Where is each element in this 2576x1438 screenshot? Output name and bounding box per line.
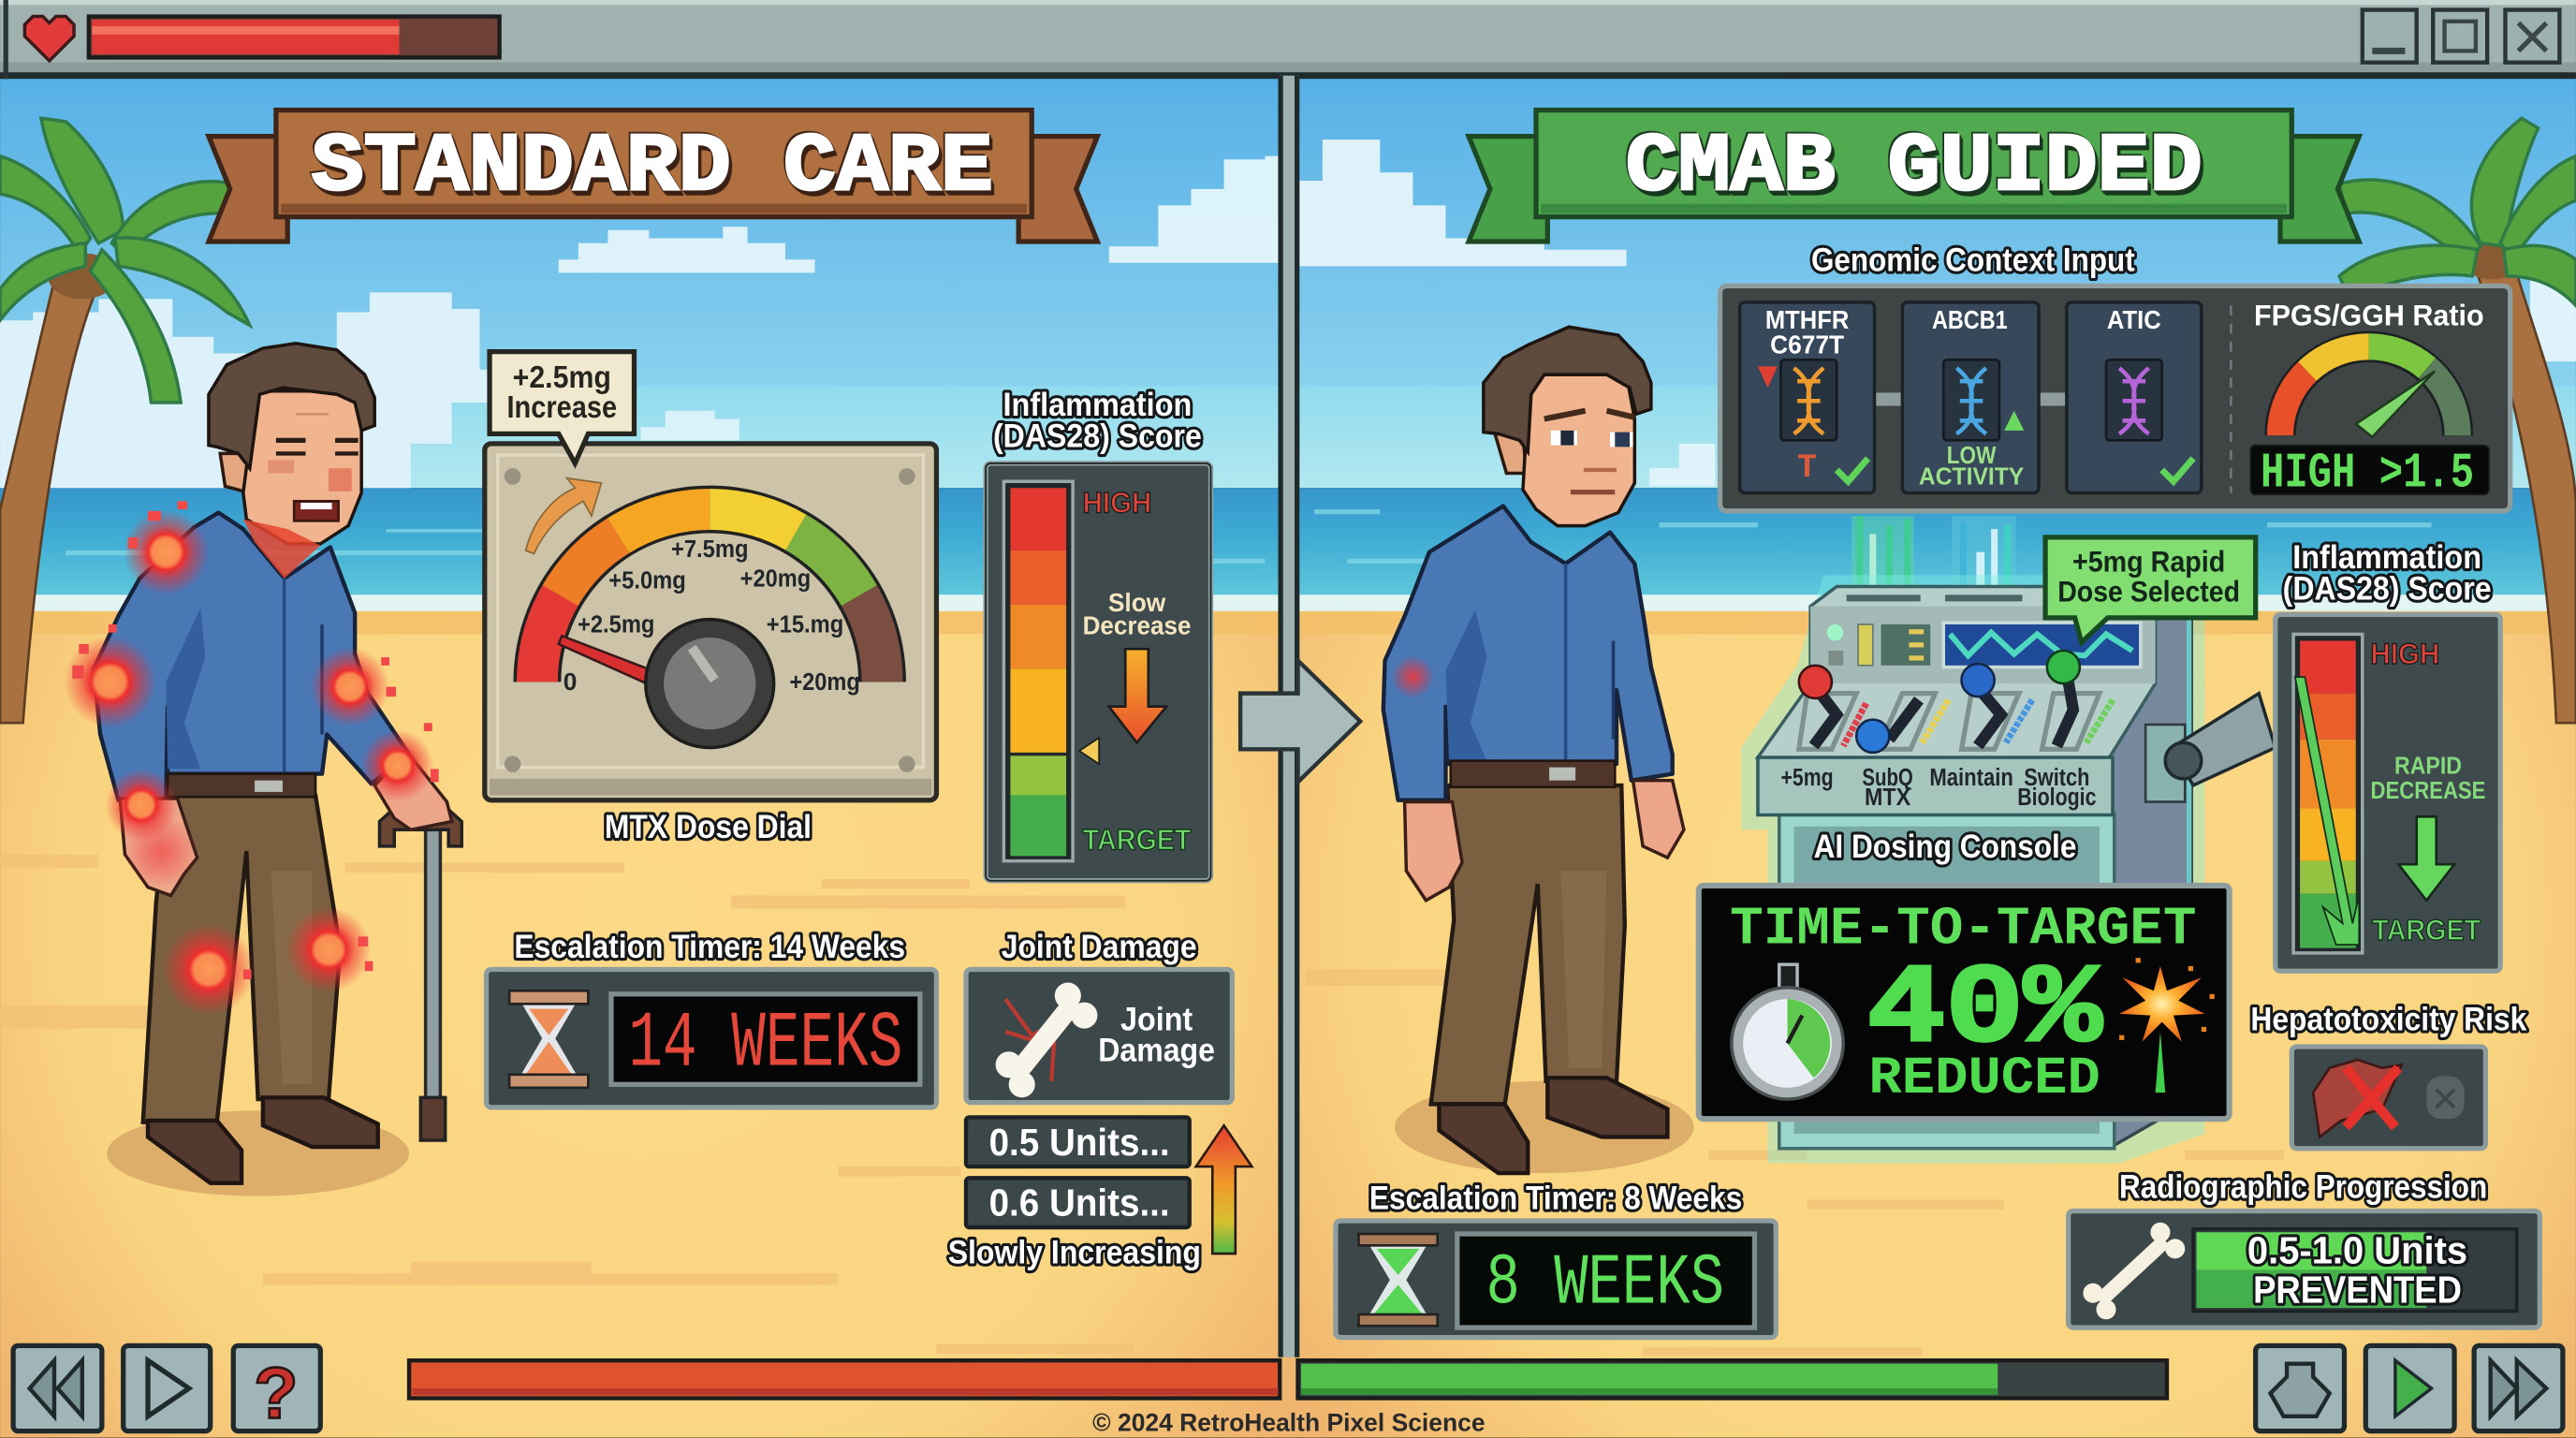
inflamed joints	[65, 501, 439, 1016]
shoes	[1439, 1078, 1667, 1173]
button: maximise	[2433, 10, 2487, 63]
heading: radiographic progression: Radiographic Progression	[2119, 1168, 2487, 1205]
gene card: ABCB1: ACTIVITY	[1919, 462, 2025, 491]
panel: joint damage: Damage	[1098, 1033, 1215, 1069]
callout: +2.5mg increase: Increase	[506, 390, 617, 425]
shirt	[1383, 506, 1673, 800]
dial labels: +15.mg	[767, 610, 843, 638]
progress bar: standard care	[409, 1360, 1280, 1399]
console option labels: Switch	[2024, 763, 2089, 791]
banner title: CMAB GUIDED	[1626, 122, 2203, 214]
button: green play	[2365, 1345, 2454, 1431]
button: fast forward	[2474, 1345, 2563, 1431]
cane	[379, 805, 461, 1140]
panel: DAS28 gauge (guided): HIGH	[2371, 637, 2439, 670]
window title bar	[0, 0, 2576, 79]
button: help	[233, 1345, 320, 1434]
console option labels: Maintain	[1929, 763, 2013, 791]
shoes	[148, 1097, 378, 1183]
panel: joint damage: Joint	[1120, 1001, 1193, 1037]
panel: MTX dose dial	[485, 444, 936, 800]
label: MTX dose dial: MTX Dose Dial	[605, 809, 812, 845]
arrow: slowly increasing	[1196, 1125, 1251, 1254]
button: minimise	[2363, 10, 2417, 63]
lever: SubQ MTX	[1856, 700, 1919, 753]
heading: inflammation score (standard)	[993, 387, 1202, 454]
led display	[611, 994, 920, 1089]
panel: time to target: 40%	[1867, 947, 2102, 1074]
belt	[168, 774, 315, 797]
character: patient in pain (standard care)	[65, 344, 461, 1196]
gene card: ABCB1	[1902, 302, 2039, 493]
gene card: MTHFR: T	[1797, 449, 1817, 487]
panel: DAS28 gauge (standard): HIGH	[1083, 486, 1151, 520]
lever: switch biologic	[2047, 651, 2080, 746]
gene card: ABCB1: ABCB1	[1932, 305, 2008, 334]
console option labels: SubQ	[1862, 763, 1913, 791]
palm tree right	[2339, 118, 2576, 723]
heading: inflammation score (standard): (DAS28) Score	[993, 418, 1202, 454]
waveform screen	[1943, 623, 2141, 668]
stat: 0.6 units: 0.6 Units...	[989, 1181, 1170, 1225]
icon: hourglass	[509, 990, 588, 1088]
health bar	[89, 17, 500, 57]
callout: +5mg rapid dose selected: Dose Selected	[2057, 574, 2240, 608]
panel: DAS28 gauge (standard)	[986, 463, 1211, 881]
heading: genomic context input: Genomic Context Input	[1811, 242, 2135, 279]
clouds	[0, 139, 2576, 488]
heading: hepatotoxicity risk: Hepatotoxicity Risk	[2250, 1001, 2527, 1037]
panel: joint damage	[966, 969, 1232, 1103]
panel: time to target: TIME-TO-TARGET	[1730, 899, 2197, 960]
panel: DAS28 gauge (guided): RAPID	[2394, 752, 2462, 780]
score bar	[1003, 481, 1073, 861]
progress bar	[2193, 1229, 2517, 1312]
dial labels: +2.5mg	[578, 610, 654, 638]
icon: spark	[2119, 958, 2215, 1093]
gauge: FPGS/GGH ratio: HIGH >1.5	[2261, 445, 2474, 501]
callout: +2.5mg increase	[490, 352, 634, 463]
callout: +2.5mg increase: +2.5mg	[513, 360, 611, 395]
panel: DAS28 gauge (standard): TARGET	[1083, 822, 1191, 856]
data streams	[1852, 516, 2015, 600]
stat: 0.5 units: 0.5 Units...	[989, 1121, 1170, 1164]
panel: DAS28 gauge (guided): DECREASE	[2371, 776, 2485, 804]
heading: inflammation score (standard): Inflammation	[1003, 387, 1192, 423]
arrow: standard to guided	[1240, 661, 1360, 782]
head	[209, 344, 374, 579]
arrow: rapid trajectory	[2295, 677, 2359, 945]
icon: hourglass	[1358, 1234, 1438, 1326]
button: play	[124, 1345, 211, 1431]
heading: escalation timer 14 weeks: Escalation Timer: 14 Weeks	[514, 929, 905, 965]
lever slots and colour strips	[1799, 694, 2113, 749]
dial labels: 0	[564, 668, 577, 696]
gene card: ABCB1: LOW	[1947, 441, 1997, 469]
lever: +5mg	[1799, 666, 1837, 746]
panel: time to target: REDUCED	[1868, 1049, 2100, 1108]
dial labels: +5.0mg	[608, 565, 686, 594]
panel: genomic context	[1720, 286, 2510, 511]
status lights and meters	[1827, 624, 1930, 666]
panel: radiographic progression: 0.5-1.0 Units	[2247, 1229, 2467, 1272]
icon: heart	[24, 17, 74, 61]
arrow: rapid decrease	[2398, 816, 2454, 901]
gene card: MTHFR: MTHFR	[1765, 305, 1849, 334]
button: rewind	[13, 1345, 102, 1431]
heading: inflammation score (guided): Inflammation	[2292, 539, 2481, 576]
button: robot helper	[2256, 1345, 2344, 1431]
dial needle	[559, 636, 661, 687]
console option labels	[1781, 763, 2096, 811]
gauge: FPGS/GGH ratio	[2250, 298, 2489, 501]
banner: cmab guided	[1469, 110, 2359, 242]
callout: +5mg rapid dose selected: +5mg Rapid	[2072, 545, 2225, 579]
arrow: slow decrease	[1109, 649, 1166, 742]
copyright: © 2024 RetroHealth Pixel Science	[1092, 1408, 1486, 1437]
console option labels: Biologic	[2017, 783, 2096, 811]
banner title: STANDARD CARE	[312, 122, 993, 214]
panel: DAS28 gauge (standard): Decrease	[1083, 610, 1191, 639]
AI dosing console	[1741, 516, 2276, 1164]
gene card: ATIC	[2067, 302, 2202, 493]
heading: escalation timer 8 weeks: Escalation Timer: 8 Weeks	[1369, 1181, 1742, 1217]
trousers	[143, 795, 340, 1123]
icon: stopwatch	[1732, 964, 1843, 1099]
dial knob	[646, 620, 774, 748]
led display: 8 WEEKS	[1486, 1244, 1724, 1326]
icon: increase arrow	[526, 478, 601, 553]
console option labels: MTX	[1865, 783, 1911, 811]
score bar	[2293, 634, 2363, 953]
progress bar: cmab guided	[1298, 1360, 2167, 1399]
panel: escalation timer 14 weeks	[487, 969, 936, 1108]
banner: standard care	[209, 110, 1097, 242]
hands	[1405, 781, 1684, 901]
dial arc	[537, 509, 883, 682]
dial labels	[564, 535, 860, 696]
dial labels: +7.5mg	[671, 535, 748, 563]
head	[1484, 327, 1651, 526]
panel: hepatotoxicity risk	[2291, 1047, 2485, 1149]
callout: +5mg rapid dose selected	[2045, 537, 2256, 642]
dial labels: +20mg	[740, 565, 811, 593]
palm tree left	[0, 118, 250, 723]
character: patient improved (CMAB guided)	[1383, 327, 1693, 1173]
panel: time to target	[1699, 886, 2230, 1119]
gauge: FPGS/GGH ratio: FPGS/GGH Ratio	[2254, 298, 2484, 331]
icon: disabled toggle	[2426, 1077, 2465, 1119]
robotic arm	[2145, 694, 2276, 801]
hands	[120, 753, 452, 895]
console option labels: +5mg	[1781, 763, 1834, 791]
button: help: ?	[254, 1354, 298, 1434]
panel: radiographic progression: PREVENTED	[2253, 1269, 2462, 1312]
heading: joint damage: Joint Damage	[1002, 929, 1197, 965]
label: AI dosing console: AI Dosing Console	[1814, 829, 2076, 865]
button: close	[2505, 10, 2559, 63]
panel: escalation timer 8 weeks	[1336, 1221, 1776, 1338]
icon: red cross	[2346, 1068, 2398, 1127]
icon: bone	[2083, 1223, 2185, 1319]
panel: DAS28 gauge (guided): TARGET	[2372, 913, 2481, 946]
belt	[1451, 761, 1615, 787]
dial labels: +20mg	[789, 668, 860, 696]
marker	[1079, 738, 1099, 764]
lever: maintain	[1962, 664, 2001, 746]
panel: DAS28 gauge (standard): Slow	[1108, 588, 1165, 617]
gene card: MTHFR	[1740, 302, 1875, 493]
led display: 14 WEEKS	[628, 1000, 902, 1089]
icon: cracked bone	[996, 983, 1097, 1097]
console body	[1758, 587, 2191, 1149]
console glow	[1741, 575, 2204, 1164]
heading: inflammation score (guided): (DAS28) Score	[2283, 571, 2492, 608]
trousers	[1431, 785, 1625, 1104]
panel: DAS28 gauge (guided)	[2276, 614, 2500, 971]
panel: radiographic progression	[2069, 1211, 2539, 1328]
shirt	[94, 513, 409, 800]
label: slowly increasing: Slowly Increasing	[948, 1235, 1201, 1271]
icon: liver	[2313, 1060, 2402, 1137]
centre divider	[1278, 76, 1299, 1357]
heading: inflammation score (guided)	[2283, 539, 2492, 608]
gene card: ATIC: ATIC	[2107, 305, 2161, 334]
mild joint glow	[1392, 655, 1434, 698]
gene card: MTHFR: C677T	[1770, 330, 1844, 359]
